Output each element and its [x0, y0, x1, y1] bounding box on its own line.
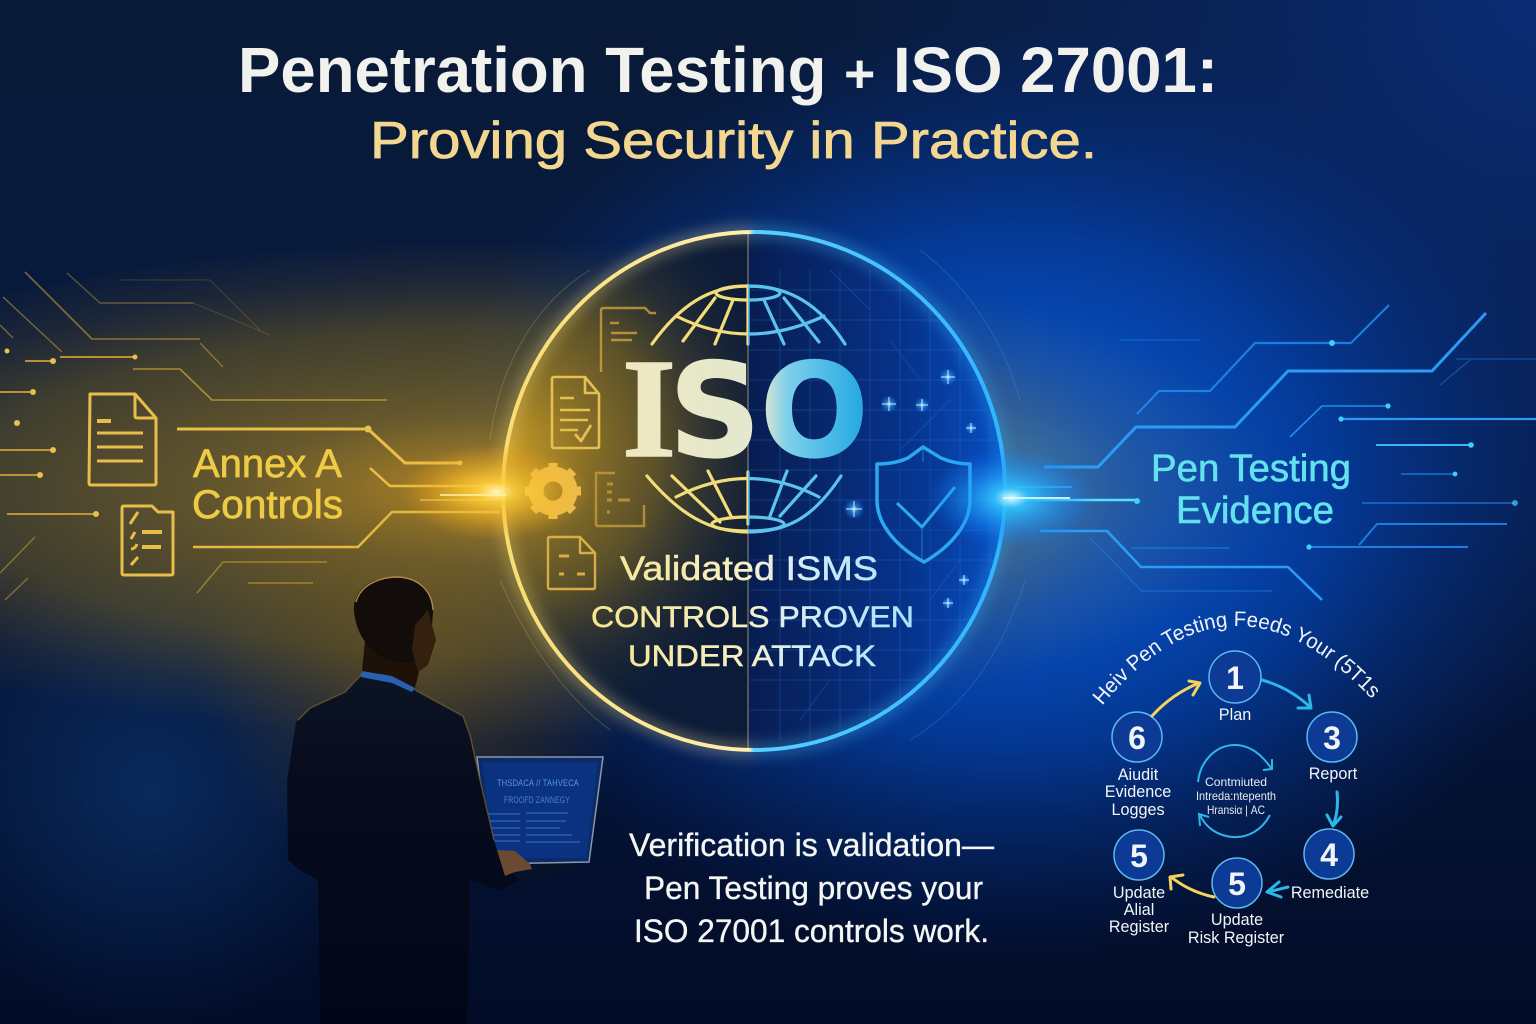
step 5 audit register: Register — [1109, 918, 1170, 936]
label: Annex A Controls — [192, 442, 343, 527]
step 5 audit register: Update — [1113, 884, 1165, 902]
step 1: 1 — [1226, 660, 1244, 696]
title — [238, 34, 1218, 170]
label: Pen Testing Evidence: Pen Testing — [1151, 448, 1351, 490]
centre loop: Contmiuted — [1205, 775, 1267, 789]
ISO heading: I — [622, 331, 676, 487]
step 3: 3 — [1323, 720, 1341, 756]
step 4: Remediate — [1291, 884, 1369, 902]
icon: checklist — [122, 506, 173, 575]
suit rim light — [298, 673, 494, 840]
laptop: THSDACA // TAHVECA — [497, 778, 579, 789]
ear and cheek — [412, 610, 436, 672]
label: Annex A Controls: Controls — [192, 483, 343, 527]
verification statement: Verification is validation— — [629, 827, 994, 863]
neck and face — [362, 625, 428, 688]
step 5 audit register: Alial — [1124, 901, 1154, 919]
title: Proving Security in Practice. — [370, 112, 1097, 170]
step 5 risk register: Update — [1211, 911, 1263, 929]
circle fill — [500, 225, 1008, 755]
step 6 — [1105, 712, 1171, 819]
ISO heading: S — [669, 337, 761, 487]
label: Pen Testing Evidence — [1151, 448, 1351, 532]
step 5 risk register: Risk Register — [1188, 929, 1285, 947]
step 3: Report — [1309, 765, 1358, 783]
blue circuit traces — [1010, 305, 1536, 600]
icon: gear — [525, 463, 581, 519]
circle caption: UNDER ATTACK — [628, 640, 876, 673]
divider line — [747, 232, 749, 750]
connection flare: blue — [926, 448, 1096, 548]
step 1 — [1209, 651, 1261, 724]
hand — [497, 850, 532, 876]
step 3 — [1307, 712, 1358, 783]
step 5 risk register: 5 — [1228, 866, 1246, 902]
laptop — [477, 757, 603, 880]
laptop: FROOFD ZANNEGY — [504, 795, 570, 806]
step 5 audit register: 5 — [1130, 838, 1148, 874]
hair rim light — [356, 577, 433, 610]
centre loop: Intreda:ntepenth — [1196, 789, 1276, 803]
globe bottom — [647, 471, 841, 532]
person with laptop — [287, 577, 603, 1024]
centre loop: Hransiα | AC — [1207, 803, 1265, 817]
head — [354, 577, 433, 663]
central ISO circle — [490, 225, 1025, 755]
step 5 risk register — [1188, 858, 1285, 947]
centre loop — [1196, 745, 1276, 837]
step 5 audit register — [1109, 830, 1170, 936]
curved heading: Heiv Pen Testing Feeds Your (5T1s — [1092, 612, 1378, 704]
icon: shield — [877, 447, 970, 562]
process cycle diagram — [1092, 612, 1378, 947]
step 6: 6 — [1128, 720, 1146, 756]
cycle arrows — [1152, 680, 1341, 897]
icon: document with check — [552, 377, 599, 448]
verification statement: Pen Testing proves your — [644, 870, 983, 906]
icon: document — [89, 394, 156, 485]
gold circuit traces — [0, 272, 500, 600]
outer faint arcs — [490, 250, 1025, 740]
globe top — [652, 286, 845, 344]
glowing ring — [503, 232, 1005, 750]
ISO heading: O — [760, 337, 868, 487]
verification statement — [629, 827, 994, 949]
step 6: Logges — [1111, 801, 1165, 819]
circle caption — [591, 550, 914, 673]
step 6: Aiudit — [1118, 766, 1159, 784]
step 4 — [1291, 829, 1369, 902]
shirt collar — [361, 671, 415, 692]
icon: faded document — [601, 308, 656, 372]
circle caption: CONTROLS PROVEN — [591, 601, 914, 634]
connection flare: gold — [401, 444, 591, 540]
label: Annex A Controls: Annex A — [193, 442, 342, 486]
step 4: 4 — [1320, 837, 1338, 873]
verification statement: ISO 27001 controls work. — [634, 913, 989, 949]
step 6: Evidence — [1105, 783, 1171, 801]
circle caption: Validated ISMS — [620, 550, 878, 588]
icon: faded list document — [596, 473, 644, 526]
step 1: Plan — [1219, 706, 1251, 724]
title: Penetration Testing + ISO 27001: — [238, 34, 1218, 106]
label: Pen Testing Evidence: Evidence — [1176, 490, 1334, 532]
sparkles — [843, 368, 977, 609]
silhouette body — [287, 673, 520, 1024]
icon: note document — [548, 537, 595, 589]
